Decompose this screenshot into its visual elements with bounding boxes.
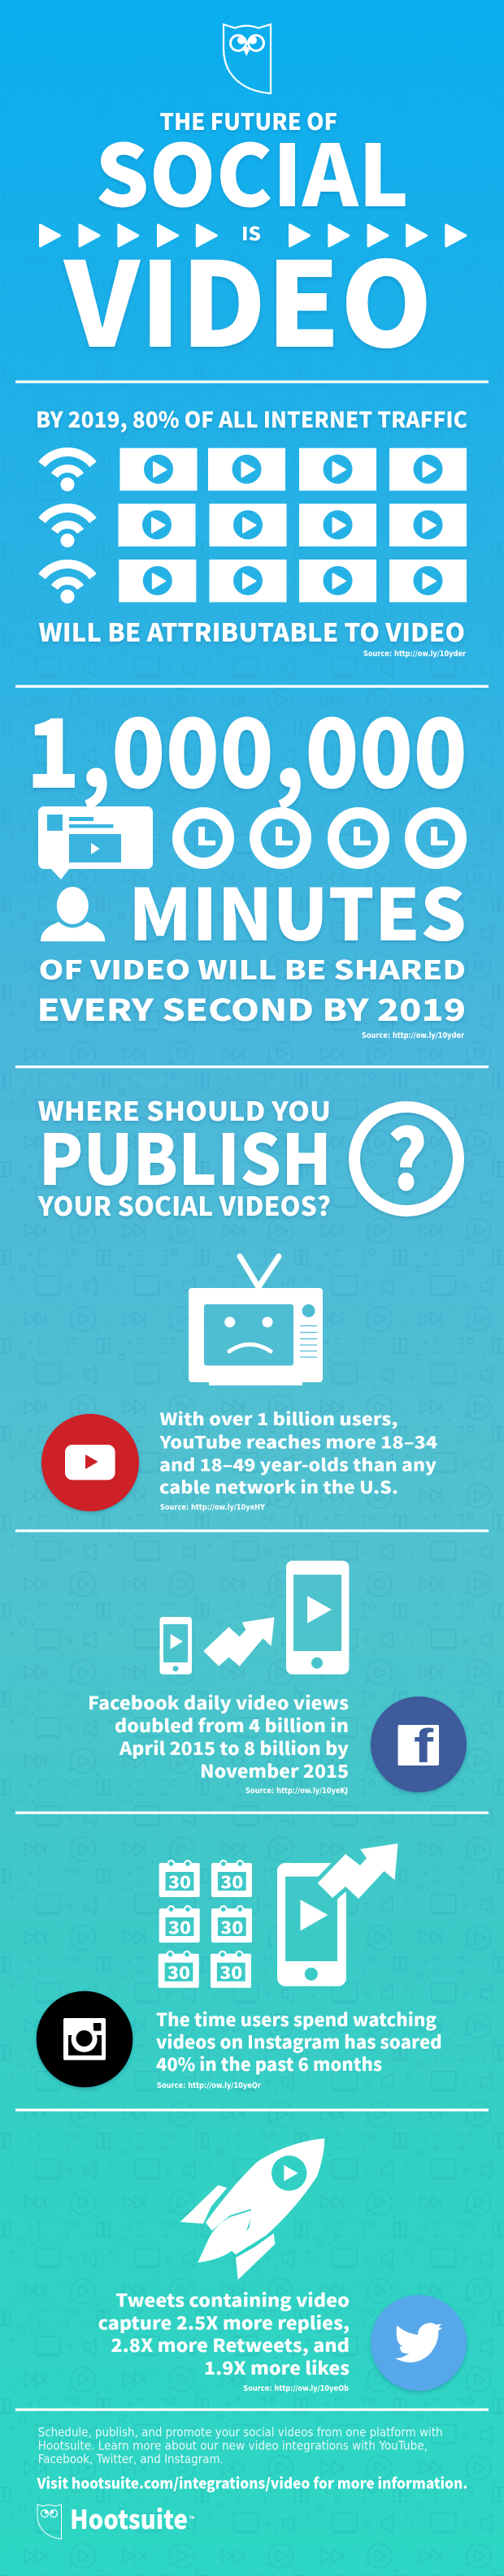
icons: 30-day calendars: 30 xyxy=(220,1869,243,1894)
panel: internet traffic xyxy=(36,403,467,659)
text: Instagram stat: The time users spend watching xyxy=(156,2006,437,2032)
icons: 30-day calendars: 30 xyxy=(168,1915,191,1939)
icon: video rocket xyxy=(180,2138,324,2280)
heading: WHERE SHOULD YOU xyxy=(38,1091,331,1129)
title xyxy=(63,105,432,381)
icons: 30-day calendars: 30 xyxy=(219,1960,242,1985)
source: Source: http://ow.ly/10yeQr xyxy=(157,2081,261,2090)
source: Source: http://ow.ly/10yeKJ xyxy=(245,1787,348,1796)
text: Facebook stat: Facebook daily video views xyxy=(88,1689,349,1715)
video thumbnails grid xyxy=(119,448,467,603)
word: minutes: MINUTES xyxy=(128,858,467,962)
panel: where should you publish xyxy=(37,1091,458,1224)
title: IS xyxy=(241,218,261,246)
text: YouTube stat: and 18–49 year-olds than any xyxy=(159,1453,437,1477)
text: YouTube stat: cable network in the U.S. xyxy=(159,1475,398,1499)
logo: Hootsuite: TM xyxy=(189,2516,194,2521)
title: VIDEO xyxy=(63,212,432,381)
source: Source: http://ow.ly/10yeHY xyxy=(160,1503,266,1512)
icon: Hootsuite owl logo xyxy=(224,24,271,93)
text: of video will be shared: OF VIDEO WILL BE SHARED xyxy=(39,950,466,988)
small phone xyxy=(159,1617,192,1675)
text: footer description: Hootsuite. Learn more about our new video integrations with YouTube, xyxy=(38,2439,428,2453)
icon: sad TV xyxy=(189,1256,323,1385)
icon: question mark circle xyxy=(354,1095,458,1214)
text: YouTube stat xyxy=(159,1407,437,1512)
source: Source: http://ow.ly/10yder xyxy=(363,650,466,659)
text: Twitter stat: capture 2.5X more replies, xyxy=(98,2309,350,2335)
text: Facebook stat: doubled from 4 billion in xyxy=(115,1712,349,1738)
text: Twitter stat: 1.9X more likes xyxy=(204,2354,350,2380)
icon: person xyxy=(41,887,105,941)
big number: 1,000,000 xyxy=(26,676,467,815)
text: Instagram stat: videos on Instagram has soared xyxy=(156,2029,442,2055)
logo: Hootsuite: Hootsuite xyxy=(70,2500,188,2537)
text: footer description: Schedule, publish, and promote your social videos from one platform with xyxy=(38,2425,442,2440)
text: Instagram stat: 40% in the past 6 months xyxy=(156,2051,382,2077)
icons: wifi column xyxy=(42,452,93,603)
background icon pattern xyxy=(0,671,504,2576)
heading: YOUR SOCIAL VIDEOS? xyxy=(37,1186,331,1224)
icon: Twitter badge xyxy=(371,2295,467,2391)
play arrows row xyxy=(41,225,466,246)
text: YouTube stat: With over 1 billion users, xyxy=(159,1407,398,1431)
arrow xyxy=(204,1618,274,1666)
text: every second by 2019: EVERY SECOND BY 2019 xyxy=(37,986,466,1030)
text: footer description xyxy=(38,2425,442,2466)
icons: 30-day calendars: 30 xyxy=(167,1960,190,1985)
text: footer description: Facebook, Twitter, and Instagram. xyxy=(38,2452,224,2466)
heading: PUBLISH xyxy=(39,1104,332,1205)
text: attributable to video: WILL BE ATTRIBUTABLE TO VIDEO xyxy=(39,612,465,649)
title: THE FUTURE OF xyxy=(159,105,337,137)
source: Source: http://ow.ly/10yder xyxy=(362,1031,464,1040)
text: Twitter stat xyxy=(98,2287,350,2393)
icon: YouTube badge xyxy=(41,1414,139,1511)
text: Facebook stat: November 2015 xyxy=(200,1757,349,1783)
text: Facebook stat: April 2015 to 8 billion by xyxy=(119,1735,349,1761)
text: Twitter stat: Tweets containing video xyxy=(115,2287,350,2313)
icon: question mark circle: ? xyxy=(387,1095,428,1214)
icons: 30-day calendars: 30 xyxy=(220,1915,243,1939)
text: Instagram stat xyxy=(156,2006,442,2090)
text: call to action: Visit hootsuite.com/integrations/video for more information. xyxy=(37,2472,467,2493)
icon: Facebook badge: f xyxy=(414,1720,434,1773)
panel: one million minutes xyxy=(26,676,467,1040)
icon: video speech bubble xyxy=(38,806,153,880)
big phone xyxy=(286,1561,349,1675)
icon: Instagram badge xyxy=(37,1991,133,2087)
text: Facebook stat xyxy=(88,1689,349,1796)
icon: phone with rising arrow xyxy=(277,1843,398,1986)
icons: 30-day calendars xyxy=(159,1860,252,1988)
text: Twitter stat: 2.8X more Retweets, and xyxy=(111,2332,350,2358)
source: Source: http://ow.ly/10yeOb xyxy=(243,2384,349,2393)
icon: Facebook badge xyxy=(371,1696,467,1792)
heading: internet traffic: BY 2019, 80% OF ALL INTERNET TRAFFIC xyxy=(36,403,467,434)
icon: phone growth xyxy=(159,1561,349,1675)
icons: 30-day calendars: 30 xyxy=(168,1869,191,1894)
text: YouTube stat: YouTube reaches more 18–34 xyxy=(159,1429,437,1454)
icons: clocks xyxy=(178,813,461,863)
title: SOCIAL xyxy=(95,108,409,231)
